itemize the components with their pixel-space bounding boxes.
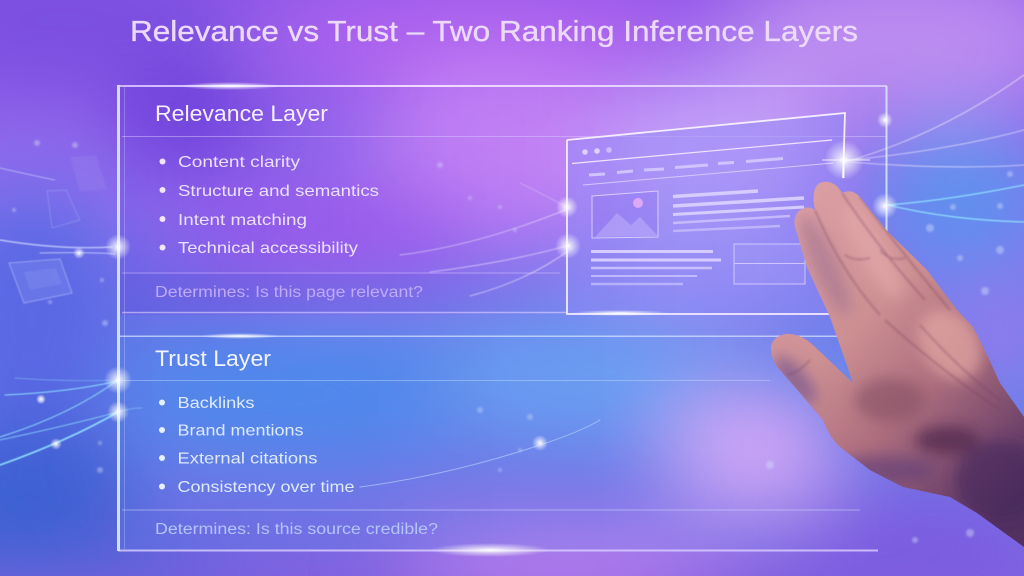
main panel frame — [117, 85, 888, 552]
list: trust bullets — [159, 395, 355, 496]
panel: relevance layer — [118, 85, 887, 315]
list: trust bullets: Backlinks — [178, 395, 254, 412]
panel: trust layer — [118, 336, 887, 552]
content lines — [591, 191, 804, 284]
light flares — [36, 82, 898, 557]
list: relevance bullets: Structure and semantics — [178, 183, 379, 200]
window top bar — [572, 140, 833, 185]
list: relevance bullets: Technical accessibility — [178, 240, 358, 257]
heading: relevance layer: Relevance Layer — [155, 101, 328, 126]
list: trust bullets: External citations — [178, 450, 318, 468]
table box — [734, 244, 805, 284]
icon: human hand — [767, 182, 1024, 547]
list: relevance bullets — [160, 154, 379, 257]
particles — [12, 140, 1013, 543]
list: trust bullets: Consistency over time — [178, 479, 355, 496]
heading: trust layer: Trust Layer — [155, 346, 271, 371]
caption: relevance determines: Determines: Is this page relevant? — [155, 284, 423, 301]
left floating cards — [9, 155, 107, 303]
list: relevance bullets: Intent matching — [178, 212, 307, 229]
list: trust bullets: Brand mentions — [178, 422, 304, 440]
list: relevance bullets: Content clarity — [178, 154, 300, 171]
browser window illustration — [567, 113, 845, 315]
light streaks — [0, 75, 1024, 487]
caption: trust determines: Determines: Is this source credible? — [155, 521, 438, 538]
image placeholder — [592, 191, 658, 238]
title: Relevance vs Trust – Two Ranking Inference Layers — [130, 16, 858, 48]
